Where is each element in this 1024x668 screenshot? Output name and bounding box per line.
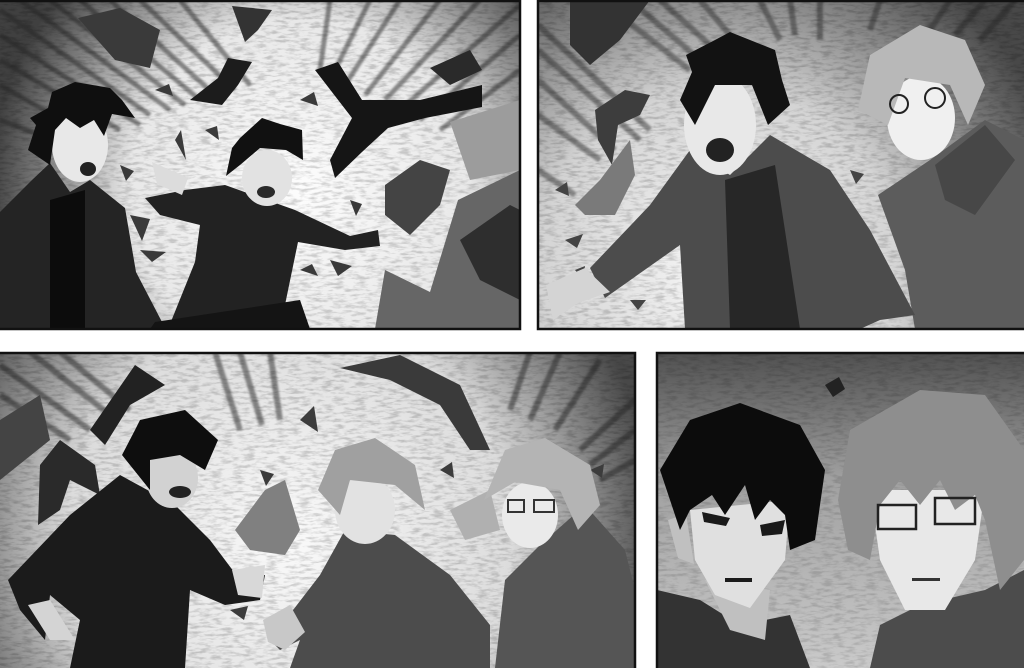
panel border: bottom left [0, 353, 635, 668]
jacket [657, 590, 810, 668]
hair [660, 403, 825, 550]
speed lines [0, 0, 520, 135]
panel: bottom right close-up [657, 352, 1024, 668]
speed lines [0, 352, 635, 480]
hand [152, 162, 188, 195]
jacket [270, 530, 490, 668]
panel: top right two characters [538, 0, 1024, 329]
jacket [0, 163, 165, 329]
face [684, 75, 756, 175]
hair [858, 25, 985, 125]
mouth [706, 138, 734, 162]
mouth [169, 486, 191, 498]
flying figure: large [315, 62, 482, 178]
hoodie [495, 505, 635, 668]
left figure [0, 82, 165, 329]
hoodie [870, 570, 1024, 668]
face [870, 490, 985, 610]
hair [28, 82, 135, 165]
panel border: top right [538, 1, 1024, 329]
left figure [8, 410, 265, 668]
hair [484, 438, 600, 530]
eyes and mouth [702, 512, 785, 582]
panel: bottom left three characters [0, 352, 635, 668]
middle figure [263, 438, 490, 668]
mouth [257, 186, 275, 198]
face [335, 476, 395, 544]
long hair strands [450, 490, 500, 540]
panel background [0, 0, 520, 329]
ear and neck [668, 514, 770, 640]
curved weapon [38, 440, 100, 525]
face [146, 448, 198, 508]
scattered fragments [170, 406, 604, 630]
panel border: top left [0, 1, 520, 329]
face [242, 150, 292, 206]
debris: right [385, 160, 450, 235]
face [52, 118, 108, 182]
hair [122, 410, 218, 490]
fist [263, 605, 305, 650]
middle figure [145, 118, 380, 329]
scattered fragments [555, 170, 864, 310]
debris: top arc [340, 355, 490, 450]
dark debris: top left [570, 0, 650, 65]
right character close-up [838, 390, 1024, 668]
mouth [912, 578, 940, 581]
face [887, 76, 955, 160]
hands [28, 600, 75, 640]
hair [318, 438, 425, 515]
scattered fragments [120, 84, 362, 276]
body and arms [8, 475, 265, 668]
flying figure: small [190, 58, 252, 105]
glasses [878, 498, 975, 529]
panel border: bottom right [657, 353, 1024, 668]
left figure [546, 32, 915, 329]
ruined buildings [375, 170, 520, 329]
hand [546, 268, 610, 320]
debris: burst fragment [235, 480, 300, 555]
dark debris [825, 377, 845, 397]
mouth [80, 162, 96, 176]
hair [226, 118, 303, 176]
panel background [0, 352, 635, 668]
hair [838, 390, 1024, 590]
face [690, 500, 790, 608]
torso and arms [145, 185, 380, 329]
glasses [508, 500, 554, 512]
panel: top left explosion [0, 0, 520, 329]
face [502, 482, 558, 548]
panel background [657, 352, 1024, 668]
debris: top [78, 8, 160, 68]
right figure [450, 438, 635, 668]
glasses [890, 88, 945, 113]
speed lines [538, 0, 1015, 195]
hoodie [878, 120, 1024, 329]
hair [680, 32, 790, 125]
left character close-up [657, 403, 825, 668]
debris: ribbon [595, 90, 650, 165]
jacket and arms [590, 135, 915, 329]
panel background [538, 0, 1024, 329]
right figure [858, 25, 1024, 329]
